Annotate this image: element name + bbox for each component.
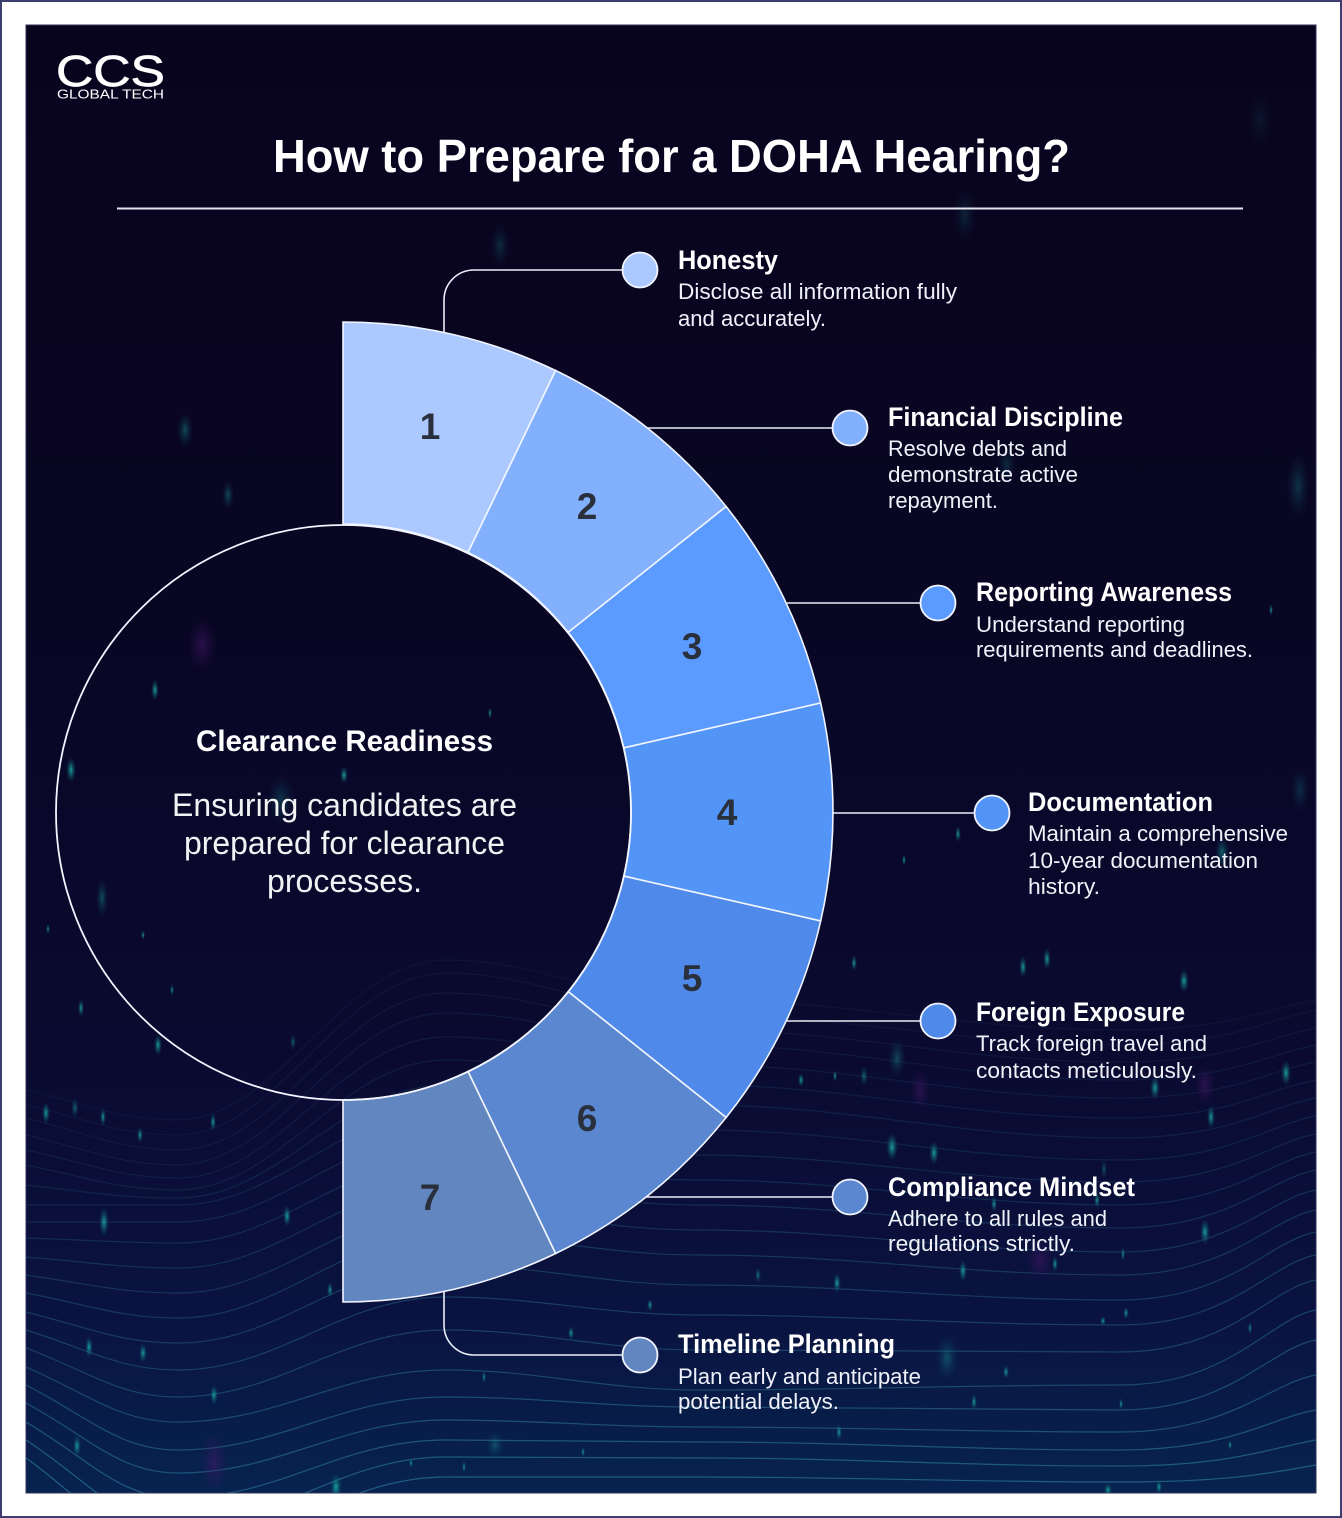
segment 1 xyxy=(343,322,556,552)
item 1: Honesty: and accurately. xyxy=(678,306,826,331)
item 2: Financial Discipline: Financial Discipline xyxy=(888,402,1123,432)
segment numbers: 4 xyxy=(717,792,738,833)
item 5: Foreign Exposure: Track foreign travel and xyxy=(976,1031,1207,1056)
item 3: Reporting Awareness: Reporting Awareness xyxy=(976,577,1232,607)
center text: Clearance Readiness: prepared for clearance xyxy=(184,825,505,861)
node dot 7 xyxy=(622,1338,658,1372)
title divider xyxy=(117,208,1243,210)
center text: Clearance Readiness: Clearance Readiness xyxy=(196,725,493,758)
item 1: Honesty xyxy=(678,245,957,331)
node dot 5 xyxy=(920,1004,956,1038)
item 1: Honesty: Honesty xyxy=(678,245,778,275)
item 7: Timeline Planning: potential delays. xyxy=(678,1389,839,1414)
item 7: Timeline Planning xyxy=(678,1329,921,1414)
connectors xyxy=(444,270,976,1355)
item 2: Financial Discipline: repayment. xyxy=(888,488,998,513)
logo: CCS Global Tech: GLOBAL TECH xyxy=(57,88,164,102)
center text: Clearance Readiness: processes. xyxy=(267,863,422,899)
item 5: Foreign Exposure: contacts meticulously. xyxy=(976,1058,1197,1083)
node dot 4 xyxy=(974,796,1010,830)
logo: CCS Global Tech: CCS xyxy=(56,47,165,96)
item 6: Compliance Mindset: Adhere to all rules and xyxy=(888,1206,1107,1231)
item 4: Documentation: Maintain a comprehensive xyxy=(1028,821,1288,846)
segment numbers: 7 xyxy=(420,1177,440,1218)
segment 4 xyxy=(624,703,833,921)
segment 7 xyxy=(343,1072,556,1302)
background wave lines xyxy=(26,960,1316,1518)
segment numbers xyxy=(420,406,738,1218)
item 6: Compliance Mindset: regulations strictly. xyxy=(888,1231,1075,1256)
segment numbers: 1 xyxy=(420,406,440,447)
item 3: Reporting Awareness xyxy=(976,577,1253,662)
item 7: Timeline Planning: Plan early and anticipate xyxy=(678,1364,921,1389)
segment 2 xyxy=(468,370,726,632)
center text: Clearance Readiness: Ensuring candidates are xyxy=(172,787,517,823)
item 5: Foreign Exposure: Foreign Exposure xyxy=(976,997,1185,1027)
node dot 3 xyxy=(920,586,956,620)
item 3: Reporting Awareness: requirements and deadlines. xyxy=(976,637,1253,662)
item 2: Financial Discipline xyxy=(888,402,1123,513)
item 4: Documentation: Documentation xyxy=(1028,787,1213,817)
item 4: Documentation: 10-year documentation xyxy=(1028,848,1258,873)
item 4: Documentation xyxy=(1028,787,1288,899)
item 6: Compliance Mindset xyxy=(888,1172,1135,1256)
segment 6 xyxy=(468,992,726,1254)
item 5: Foreign Exposure xyxy=(976,997,1207,1083)
center text: Clearance Readiness xyxy=(172,725,517,899)
segment 5 xyxy=(568,876,821,1118)
segment numbers: 6 xyxy=(577,1098,597,1139)
node dot 6 xyxy=(832,1180,868,1214)
node dot 2 xyxy=(832,410,868,446)
segment 3 xyxy=(568,506,821,748)
title: How to Prepare for a DOHA Hearing? xyxy=(273,130,1070,182)
center circle outline xyxy=(56,525,631,1100)
segment numbers: 3 xyxy=(682,626,702,667)
node dot 1 xyxy=(622,252,658,288)
item 1: Honesty: Disclose all information fully xyxy=(678,279,957,304)
segment numbers: 2 xyxy=(577,486,597,527)
semicircle segmented ring xyxy=(343,322,833,1302)
item 2: Financial Discipline: Resolve debts and xyxy=(888,436,1067,461)
segment numbers: 5 xyxy=(682,958,702,999)
item 3: Reporting Awareness: Understand reporting xyxy=(976,612,1185,637)
item 2: Financial Discipline: demonstrate active xyxy=(888,462,1078,487)
item 4: Documentation: history. xyxy=(1028,874,1100,899)
item 7: Timeline Planning: Timeline Planning xyxy=(678,1329,895,1359)
item 6: Compliance Mindset: Compliance Mindset xyxy=(888,1172,1135,1202)
